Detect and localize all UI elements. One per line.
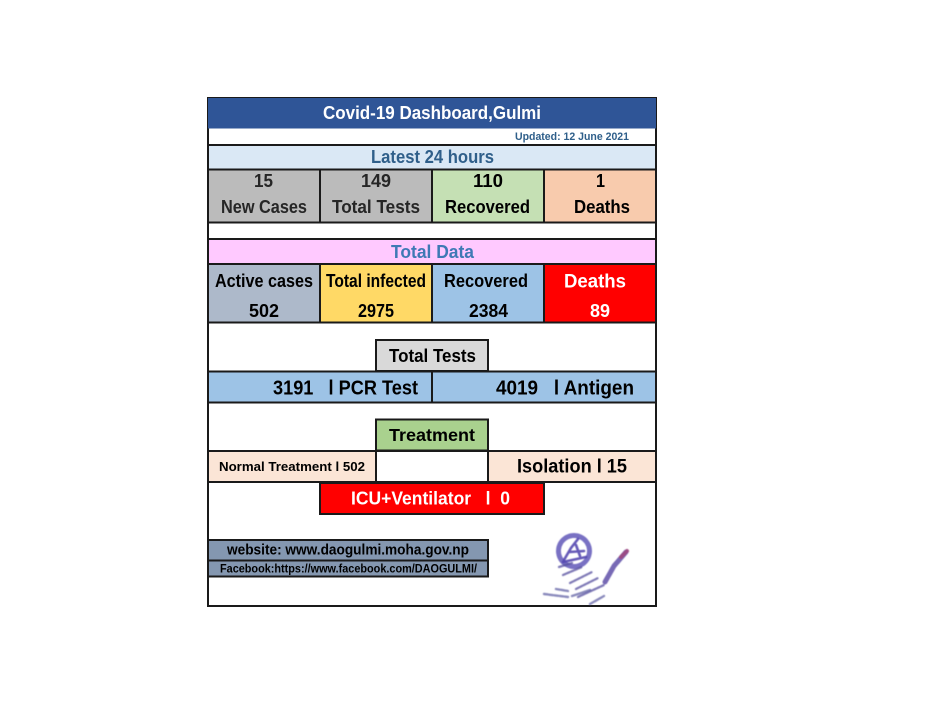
stat: new cases: New Cases: [221, 196, 307, 217]
stat: deaths total: 89: [590, 300, 610, 321]
title banner: [208, 98, 656, 128]
stat: deaths total: Deaths: [564, 270, 626, 292]
heading: latest 24 hours: Latest 24 hours: [371, 147, 494, 167]
stat: PCR tests: [208, 372, 432, 402]
stat: active cases: 502: [249, 300, 279, 321]
stat: isolation: Isolation l 15: [517, 456, 627, 478]
heading: total data: [208, 239, 656, 264]
panel: total tests: [208, 340, 656, 402]
stat: isolation: [488, 451, 656, 482]
icon: official stamp: [544, 536, 627, 604]
stat: recovered: 110: [473, 170, 503, 191]
panel: dashboard frame: [208, 98, 656, 606]
stat: recovered: [432, 170, 544, 222]
heading: treatment: Treatment: [389, 425, 475, 445]
stat: normal treatment: Normal Treatment l 502: [219, 459, 365, 474]
stat: recovered total: 2384: [469, 300, 509, 321]
panel: total data: [208, 239, 656, 322]
stat: new cases: 15: [254, 170, 273, 191]
stat: total tests: [320, 170, 432, 222]
heading: total tests: Total Tests: [389, 345, 476, 366]
stat: active cases: [208, 264, 320, 322]
stat: antigen tests: [432, 372, 656, 402]
stat: deaths total: [544, 264, 656, 322]
panel: treatment: [208, 420, 656, 514]
empty middle cell: [376, 451, 488, 482]
stat: total tests: Total Tests: [332, 196, 420, 217]
stat: total tests: 149: [361, 170, 391, 191]
stat: total infected: [320, 264, 432, 322]
stat: ICU and ventilator: [320, 483, 544, 514]
stat: total infected: Total infected: [326, 271, 426, 291]
heading: total data: Total Data: [391, 241, 475, 262]
stat: deaths: [544, 170, 656, 222]
stat: total infected: 2975: [358, 301, 394, 321]
stat: PCR tests: 3191 l PCR Test: [273, 376, 418, 400]
panel: latest 24 hours: [208, 145, 656, 222]
heading: treatment: [376, 420, 488, 450]
stat: recovered total: Recovered: [444, 270, 528, 291]
stat: recovered total: [432, 264, 544, 322]
stat: deaths: Deaths: [574, 196, 630, 217]
updated date: Updated: 12 June 2021: [515, 131, 629, 143]
stat: deaths: 1: [596, 170, 605, 191]
stat: antigen tests: 4019 l Antigen: [496, 376, 634, 400]
stat: new cases: [208, 170, 320, 222]
heading: latest 24 hours: [208, 145, 656, 170]
stat: active cases: Active cases: [215, 270, 313, 291]
stat: normal treatment: [208, 451, 376, 482]
title banner: Covid-19 Dashboard,Gulmi: [323, 102, 541, 123]
stat: recovered: Recovered: [445, 196, 530, 217]
facebook link bar: Facebook:https://www.facebook.com/DAOGULMI/: [220, 562, 478, 576]
heading: total tests: [376, 340, 488, 371]
website link bar: website: www.daogulmi.moha.gov.np: [226, 542, 469, 558]
stat: ICU and ventilator: ICU+Ventilator l 0: [351, 488, 510, 508]
